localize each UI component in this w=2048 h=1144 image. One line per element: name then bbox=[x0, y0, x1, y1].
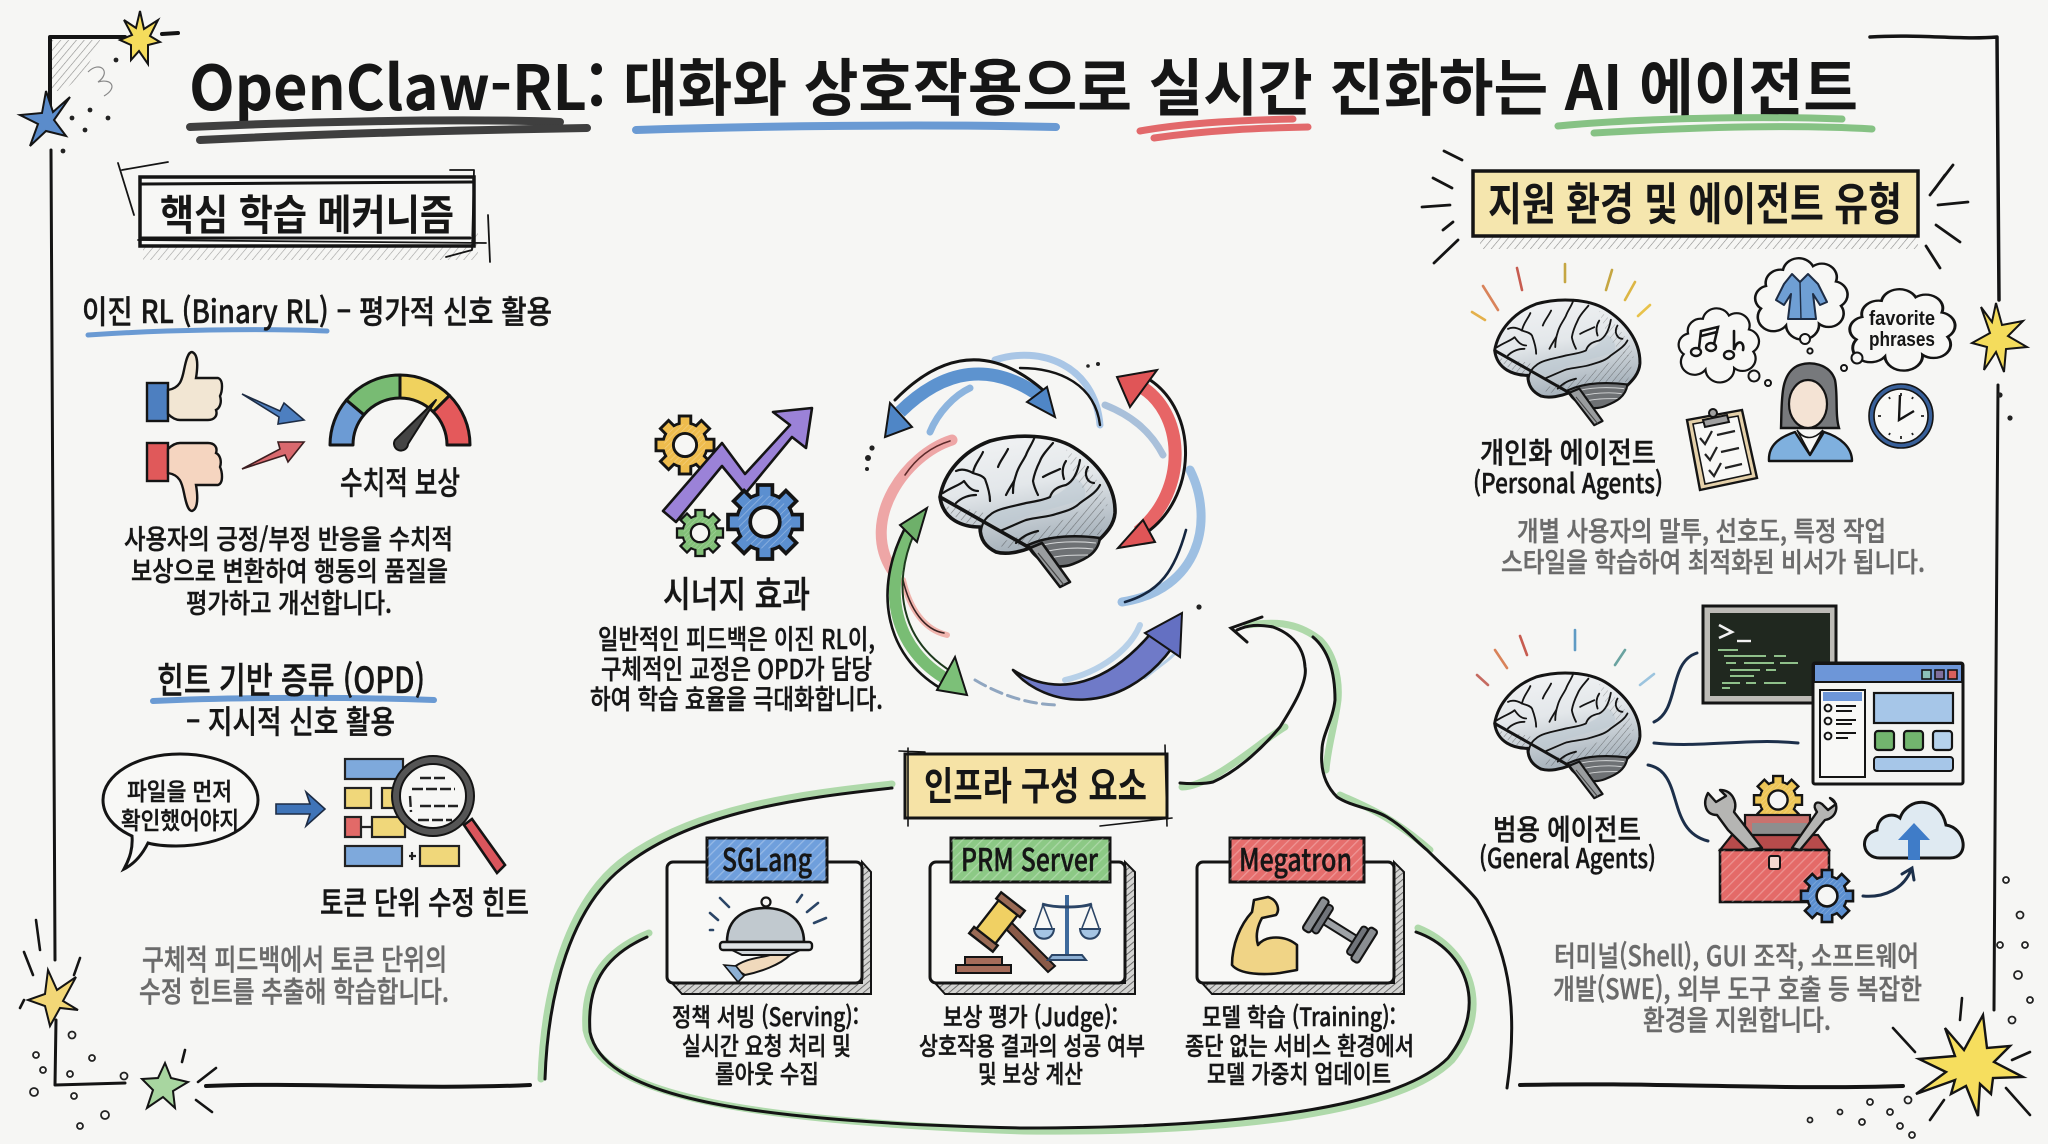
caption: PRM Server bbox=[919, 998, 1145, 1091]
label: general agents bbox=[1479, 807, 1656, 876]
thought bubbles dots bbox=[1748, 334, 1862, 386]
caption: PRM Server: 상호작용 결과의 성공 여부 bbox=[919, 1027, 1145, 1063]
tab: SGLang: SGLang bbox=[722, 835, 812, 880]
label: personal agents: 개인화 에이전트 bbox=[1480, 430, 1656, 472]
caption: SGLang: 롤아웃 수집 bbox=[715, 1055, 819, 1091]
speech bubble: 파일을 먼저 bbox=[127, 772, 232, 807]
icon: terminal window bbox=[1703, 606, 1836, 703]
heading: infrastructure components bbox=[899, 745, 1172, 826]
icon: thumbs up bbox=[147, 352, 222, 421]
panel: infrastructure components bbox=[541, 617, 1512, 1131]
text: synergy description: 하여 학습 효율을 극대화합니다. bbox=[590, 678, 883, 717]
title underline: red bbox=[1140, 119, 1308, 138]
caption: Megatron bbox=[1185, 998, 1414, 1091]
arrow: speech to token hints bbox=[276, 792, 325, 826]
text: binary RL description bbox=[124, 518, 453, 621]
arrow: green double-headed bbox=[887, 508, 967, 695]
arrow: red double-headed bbox=[1117, 370, 1186, 548]
speech bubble bbox=[103, 754, 258, 869]
icon: gavel and scales bbox=[956, 892, 1100, 973]
title underline: black bbox=[190, 120, 587, 140]
label: personal agents bbox=[1473, 430, 1663, 501]
text: OPD description: 수정 힌트를 추출해 학습합니다. bbox=[139, 969, 449, 1011]
icon: general agent brain bbox=[1477, 630, 1654, 798]
text: general agent description: 개발(SWE), 외부 도구 호출 등 복잡한 bbox=[1553, 968, 1922, 1008]
icon: person bbox=[1769, 363, 1852, 461]
card: Megatron bbox=[1185, 835, 1414, 1091]
icon: thought cloud favorite phrases bbox=[1850, 289, 1955, 371]
caption: SGLang: 실시간 요청 처리 및 bbox=[682, 1027, 851, 1063]
title underline: green bbox=[1558, 118, 1872, 133]
icon: synergy gears and rising arrow bbox=[656, 408, 812, 559]
heading: infrastructure components: 인프라 구성 요소 bbox=[924, 756, 1147, 812]
subheading: binary RL: 이진 RL (Binary RL) – 평가적 신호 활용 bbox=[82, 287, 552, 333]
label: personal agents: (Personal Agents) bbox=[1473, 462, 1663, 501]
icon: serving cloche bbox=[710, 895, 826, 982]
caption: SGLang: 정책 서빙 (Serving): bbox=[672, 998, 859, 1034]
text: OPD description: 구체적 피드백에서 토큰 단위의 bbox=[142, 937, 447, 979]
connector lines from brain to tools bbox=[1648, 653, 1798, 841]
speech bubble: 확인했어야지 bbox=[121, 801, 239, 836]
subheading: hint-based distillation (OPD) bbox=[153, 652, 434, 743]
text: general agent description bbox=[1553, 935, 1922, 1039]
text: general agent description: 터미널(Shell), GUI 조작, 소프트웨어 bbox=[1554, 935, 1919, 975]
heading: core learning mechanisms: 핵심 학습 메커니즘 bbox=[160, 182, 454, 243]
card: PRM Server bbox=[919, 835, 1145, 1091]
heading: supported environments and agent types: 지원 환경 및 에이전트 유형 bbox=[1488, 168, 1902, 233]
icon: thought cloud with clothing bbox=[1755, 258, 1848, 340]
arrow: purple bbox=[1013, 613, 1182, 700]
icon: clock bbox=[1869, 384, 1933, 448]
central learning loop bbox=[865, 355, 1202, 705]
icon: GUI window bbox=[1813, 663, 1963, 784]
icon: cloud upload bbox=[1863, 802, 1963, 896]
label: general agents: 범용 에이전트 bbox=[1493, 807, 1641, 849]
text: synergy description bbox=[590, 618, 883, 717]
right panel: supported environments and agent types bbox=[1422, 151, 1968, 1039]
title underline: blue bbox=[636, 126, 1056, 130]
caption: Megatron: 종단 없는 서비스 환경에서 bbox=[1185, 1027, 1414, 1063]
text: synergy description: 일반적인 피드백은 이진 RL이, bbox=[598, 618, 875, 657]
left panel: core learning mechanisms bbox=[82, 162, 552, 1011]
caption: Megatron: 모델 학습 (Training): bbox=[1202, 998, 1396, 1034]
icon: flexed arm and dumbbell bbox=[1232, 896, 1378, 974]
icon: token blocks with magnifier bbox=[345, 756, 505, 873]
text: general agent description: 환경을 지원합니다. bbox=[1643, 999, 1831, 1039]
green connector lines bbox=[541, 617, 1512, 1131]
tab: Megatron: Megatron bbox=[1239, 835, 1352, 880]
text: OPD description bbox=[139, 937, 449, 1011]
arrow: thumbs up to gauge bbox=[242, 394, 304, 424]
arrow: thumbs down to gauge bbox=[242, 442, 304, 469]
thin sketch arcs around the loop bbox=[881, 355, 1201, 705]
label: numeric reward: 수치적 보상 bbox=[340, 458, 460, 504]
text: binary RL description: 보상으로 변환하여 행동의 품질을 bbox=[131, 550, 448, 589]
text: synergy description: 구체적인 교정은 OPD가 담당 bbox=[601, 648, 872, 687]
label: general agents: (General Agents) bbox=[1479, 837, 1656, 876]
heading: core learning mechanisms bbox=[118, 162, 490, 262]
text: personal agent description bbox=[1501, 510, 1925, 580]
text: binary RL description: 사용자의 긍정/부정 반응을 수치적 bbox=[124, 518, 453, 557]
caption: PRM Server: 및 보상 계산 bbox=[978, 1055, 1083, 1091]
icon: central brain bbox=[940, 436, 1115, 587]
icon: thought cloud favorite phrases: favorite bbox=[1869, 308, 1935, 330]
title: OpenClaw-RL: 대화와 상호작용으로 실시간 진화하는 AI 에이전트 bbox=[189, 38, 1858, 128]
caption: PRM Server: 보상 평가 (Judge): bbox=[943, 998, 1118, 1034]
subheading: hint-based distillation (OPD): – 지시적 신호 활용 bbox=[186, 697, 395, 743]
icon: thought cloud with music notes bbox=[1679, 308, 1759, 382]
label: token-level edit hints: 토큰 단위 수정 힌트 bbox=[320, 878, 529, 924]
text: personal agent description: 스타일을 학습하여 최적화된 비서가 됩니다. bbox=[1501, 541, 1925, 580]
caption: SGLang bbox=[672, 998, 859, 1091]
heading: synergy effect: 시너지 효과 bbox=[663, 566, 810, 618]
icon: thought cloud favorite phrases: phrases bbox=[1869, 329, 1935, 351]
icon: reward gauge bbox=[330, 375, 470, 451]
text: personal agent description: 개별 사용자의 말투, 선호도, 특정 작업 bbox=[1517, 510, 1886, 549]
icon: clipboard checklist bbox=[1687, 409, 1757, 490]
icon: toolbox with gears bbox=[1705, 776, 1853, 922]
icon: personal agent brain bbox=[1472, 264, 1650, 425]
subheading: hint-based distillation (OPD): 힌트 기반 증류 (OPD) bbox=[157, 652, 425, 704]
tab: PRM Server: PRM Server bbox=[961, 835, 1098, 880]
icon: thumbs down bbox=[147, 443, 222, 511]
text: binary RL description: 평가하고 개선합니다. bbox=[186, 582, 392, 621]
heading: supported environments and agent types bbox=[1422, 151, 1968, 268]
caption: Megatron: 모델 가중치 업데이트 bbox=[1207, 1055, 1391, 1091]
arrow: blue double-headed bbox=[885, 360, 1055, 437]
card: SGLang bbox=[667, 835, 871, 1091]
